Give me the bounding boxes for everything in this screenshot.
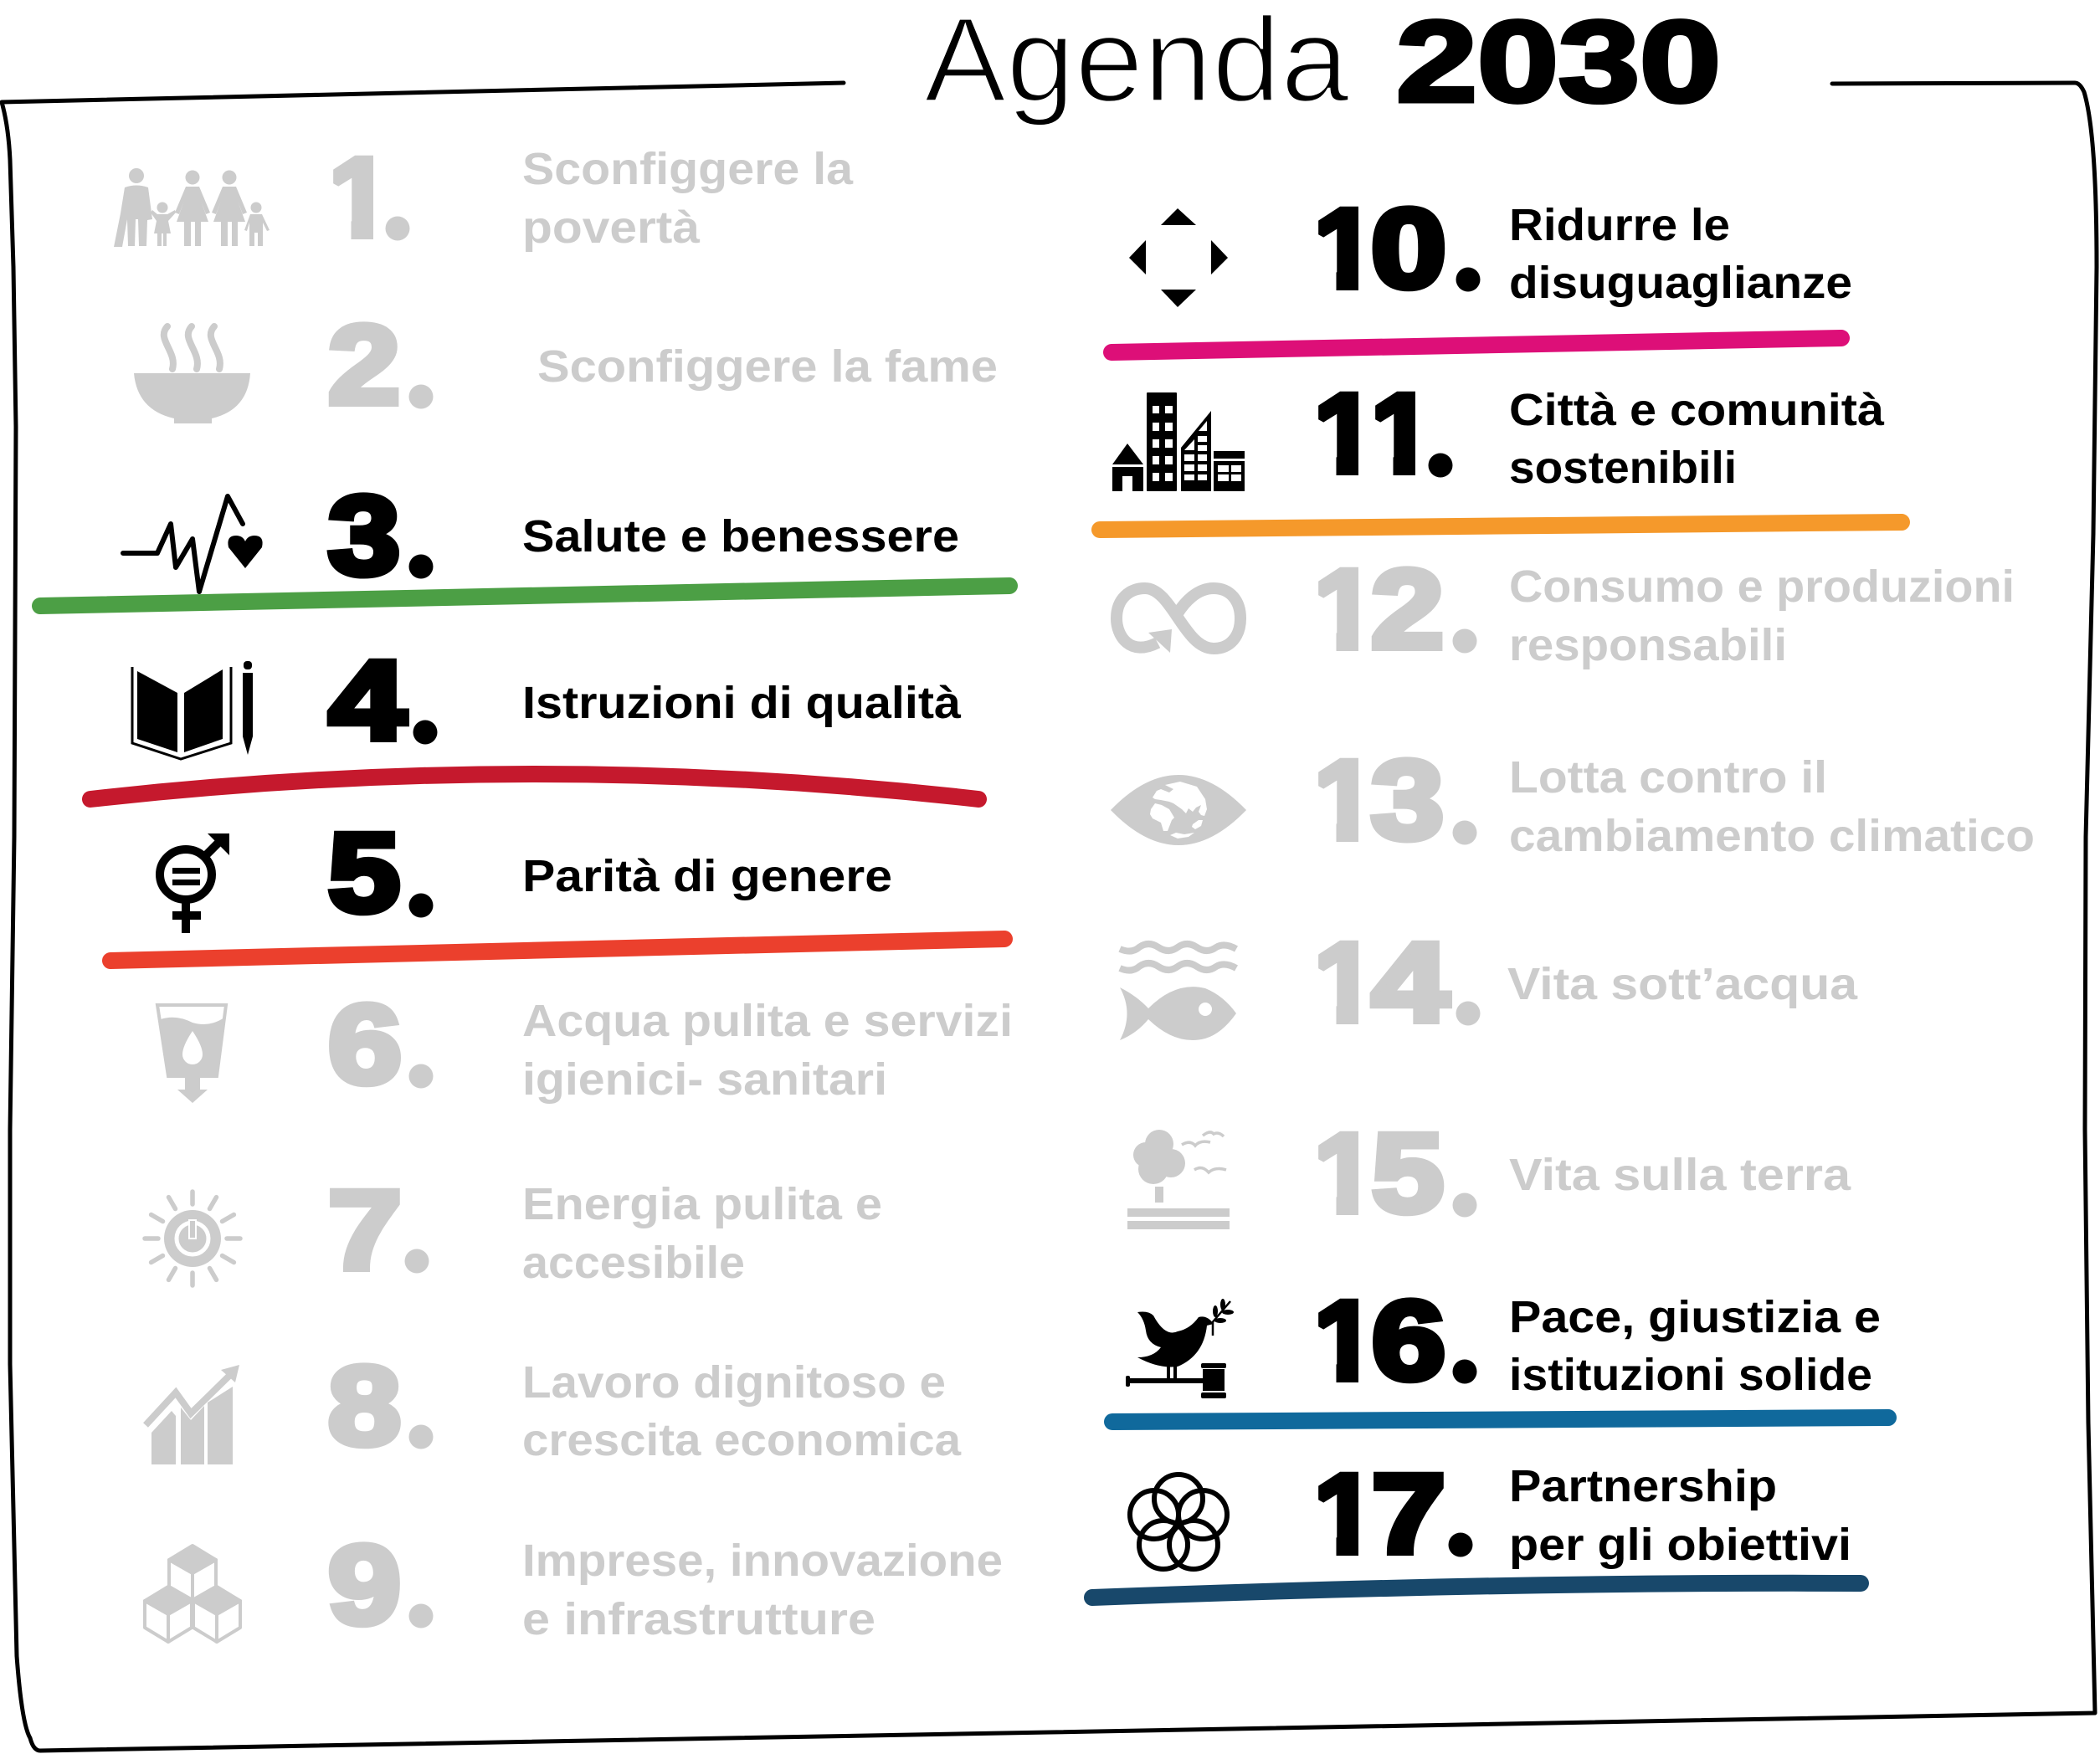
label — [1509, 562, 2015, 670]
number: 5 — [1372, 1111, 1444, 1236]
label: accesibile — [522, 1238, 745, 1288]
label: Lavoro dignitoso e — [522, 1357, 946, 1408]
number: 1 — [1371, 372, 1434, 496]
number: 6 — [1372, 1279, 1445, 1403]
icon: cubes — [145, 1546, 240, 1642]
goal 14 — [1118, 941, 1858, 1040]
underline blue — [1112, 1418, 1888, 1422]
label: Imprese, innovazione — [522, 1536, 1003, 1586]
dot — [1453, 820, 1476, 845]
label — [1509, 1292, 1881, 1400]
underline dark red — [90, 774, 978, 799]
number: 0 — [1371, 187, 1446, 311]
goal 7 — [145, 1168, 882, 1293]
icon: tree and birds — [1127, 1130, 1230, 1229]
label: e infrastrutture — [522, 1594, 875, 1644]
number — [1318, 1131, 1445, 1217]
dot — [405, 1249, 429, 1274]
number: 3 — [328, 474, 400, 598]
number: 4 — [329, 639, 406, 763]
number: 2 — [328, 303, 400, 428]
label: Sconfiggere la — [522, 144, 854, 194]
icon: soup bowl — [134, 326, 250, 423]
label: Salute e benessere — [522, 511, 959, 562]
number: 1 — [1314, 187, 1377, 311]
label: Sconfiggere la fame — [537, 341, 998, 392]
label: Energia pulita e — [522, 1179, 882, 1229]
dot — [1448, 1533, 1473, 1557]
number — [1318, 1297, 1445, 1384]
goal 11 — [1100, 372, 1902, 530]
goal 1 — [114, 151, 854, 252]
dot — [385, 216, 410, 241]
label: Pace, giustizia e — [1509, 1292, 1881, 1342]
label: Parità di genere — [522, 851, 892, 901]
dot — [1453, 1193, 1476, 1217]
title: 2030 — [1396, 0, 1721, 126]
label: povertà — [522, 203, 701, 253]
label: Città e comunità — [1509, 385, 1885, 435]
icon: eye with globe — [1111, 775, 1246, 845]
dot — [408, 894, 434, 917]
label: Ridurre le — [1509, 200, 1730, 250]
number — [1318, 392, 1415, 475]
number: 5 — [328, 811, 400, 936]
dot — [408, 1603, 434, 1628]
label: Istruzioni di qualità — [522, 678, 962, 728]
number: 4 — [1372, 921, 1449, 1045]
goal 12 — [1111, 566, 2011, 669]
goal 4 — [90, 639, 978, 799]
dot — [408, 1424, 434, 1449]
label — [522, 1536, 1003, 1644]
number: 1 — [1314, 738, 1377, 863]
label: Consumo e produzioni — [1509, 562, 2015, 612]
label — [1509, 385, 1885, 493]
label: per gli obiettivi — [1509, 1520, 1851, 1570]
underline orange — [1100, 522, 1902, 530]
icon: family — [114, 168, 270, 247]
goal 13 — [1111, 756, 2033, 852]
icon: dove and gavel — [1126, 1299, 1234, 1398]
dot — [1456, 268, 1480, 291]
goal 9 — [145, 1523, 1003, 1648]
underline pink — [1112, 338, 1841, 352]
underline red — [110, 939, 1004, 961]
number: 9 — [328, 1523, 401, 1648]
number: 1 — [1314, 1452, 1377, 1577]
dot — [1453, 1359, 1476, 1384]
label: Acqua pulita e servizi — [522, 996, 1013, 1046]
label — [1509, 1461, 1851, 1570]
icon: gender equality — [160, 833, 229, 933]
label — [522, 996, 1013, 1105]
icon: growth chart — [146, 1365, 239, 1464]
icon: water glass — [157, 1005, 226, 1103]
number: 6 — [328, 982, 402, 1107]
title — [924, 0, 1721, 127]
goal 2 — [134, 303, 998, 428]
number — [1318, 205, 1445, 291]
goal 6 — [157, 982, 1013, 1107]
underline navy — [1092, 1583, 1861, 1598]
icon: heartbeat — [123, 496, 263, 592]
number: 7 — [1372, 1452, 1445, 1577]
icon: four arrows — [1129, 208, 1228, 307]
goal 5 — [110, 811, 1004, 961]
number: 3 — [1371, 738, 1444, 863]
number: 1 — [1314, 1279, 1377, 1403]
icon: infinity loop — [1117, 588, 1240, 653]
label: Lotta contro il — [1509, 752, 1827, 803]
dot — [1453, 629, 1476, 653]
icon: book and pencil — [132, 661, 253, 759]
number: 1 — [329, 136, 392, 260]
number — [1318, 566, 1443, 651]
label — [522, 1179, 882, 1288]
label: istituzioni solide — [1509, 1350, 1872, 1400]
number — [1318, 1471, 1444, 1556]
label: Vita sulla terra — [1509, 1150, 1851, 1200]
underline green — [40, 586, 1009, 606]
dot — [413, 720, 437, 745]
icon: five rings — [1130, 1474, 1227, 1569]
number: 1 — [1314, 547, 1377, 672]
goal 10 — [1112, 187, 1852, 352]
label — [1509, 752, 2035, 861]
goal 16 — [1112, 1279, 1888, 1422]
number — [1318, 756, 1443, 844]
goal 8 — [146, 1344, 962, 1469]
dot — [1456, 1001, 1480, 1026]
label: responsabili — [1509, 620, 1787, 670]
label: igienici- sanitari — [522, 1054, 887, 1105]
label: crescita economica — [522, 1415, 962, 1465]
label: cambiamento climatico — [1509, 811, 2035, 861]
icon: sun power — [145, 1192, 240, 1285]
dot — [408, 385, 434, 408]
goal 3 — [40, 474, 1009, 606]
label — [1509, 200, 1852, 308]
number: 7 — [328, 1168, 402, 1293]
number: 1 — [1314, 1111, 1377, 1236]
goal 15 — [1127, 1130, 1851, 1229]
label: disuguaglianze — [1509, 258, 1852, 308]
dot — [408, 1064, 434, 1088]
goal 17 — [1092, 1452, 1861, 1598]
label — [522, 1357, 962, 1465]
icon: city — [1112, 392, 1245, 491]
number: 1 — [1314, 372, 1377, 496]
label: Partnership — [1509, 1461, 1777, 1511]
label — [522, 144, 854, 253]
dot — [408, 554, 434, 579]
number — [1318, 941, 1452, 1024]
dot — [1428, 454, 1453, 477]
icon: waves and fish — [1120, 944, 1236, 1040]
label: sostenibili — [1509, 443, 1737, 493]
number: 1 — [1314, 921, 1377, 1045]
label: Vita sott’acqua — [1507, 959, 1858, 1009]
number: 8 — [328, 1344, 401, 1469]
number: 2 — [1371, 547, 1444, 672]
